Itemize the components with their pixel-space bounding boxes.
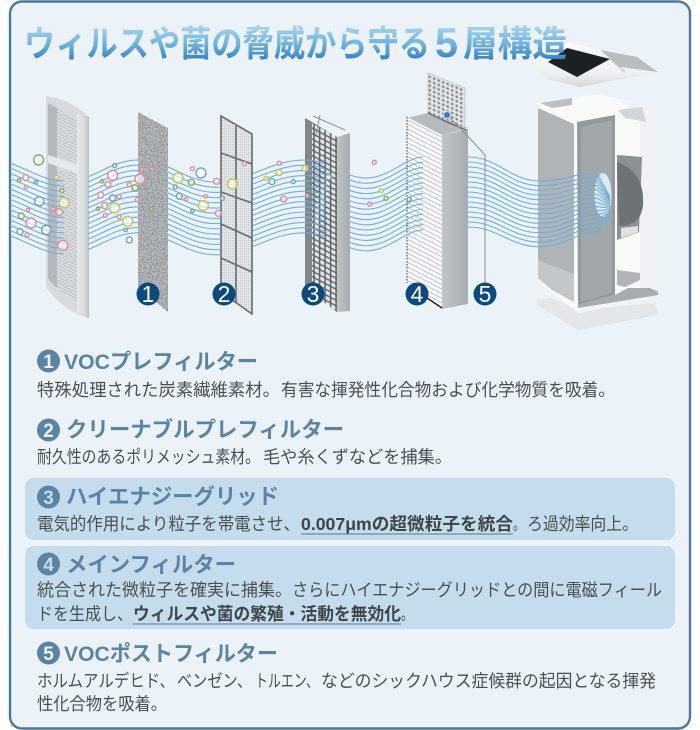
- air purifier base: [537, 298, 658, 330]
- filter illustration: 1 carbon fibre VOC pre-filter: [138, 112, 168, 312]
- section 4: main filter panel: 。: [401, 604, 413, 624]
- section 2: cleanable pre-filter: 耐久性のあるポリメッシュ素材。: [37, 447, 260, 467]
- section 5: VOC post-filter: 5: [43, 644, 54, 665]
- section 5: VOC post-filter: ベンゼン、: [177, 671, 252, 691]
- filter illustration: 2 cleanable pre-filter: [221, 116, 252, 314]
- air purifier body: [538, 94, 658, 313]
- section 2: cleanable pre-filter: 2: [43, 421, 54, 442]
- airborne particles: [17, 155, 411, 250]
- section 5: VOC post-filter: [37, 642, 656, 714]
- section 2: cleanable pre-filter: 毛や糸くずなどを捕集。: [263, 447, 452, 467]
- section 4: main filter panel: さらにハイエナジーグリッドとの間に電磁フィール: [292, 580, 662, 600]
- section 3: high-energy grid panel: 3: [43, 488, 54, 509]
- section 1: VOC pre-filter: VOCプレフィルター: [64, 350, 258, 374]
- badge 4: [406, 281, 428, 307]
- section 3: high-energy grid panel: 電気的作用により粒子を帯電させ、: [37, 514, 300, 534]
- badge 5: [474, 281, 496, 307]
- section 5: VOC post-filter: 性化合物を吸着。: [37, 694, 167, 714]
- air purifier top lid: [532, 42, 658, 87]
- section 3: high-energy grid panel: ろ過効率向上。: [527, 514, 638, 534]
- section 4: main filter panel: [25, 546, 675, 629]
- filter illustration: front cover: [46, 96, 89, 318]
- section 4: main filter panel: メインフィルター: [66, 553, 236, 577]
- section 4: main filter panel: 4: [43, 555, 54, 576]
- leader line to number 5: [444, 112, 485, 285]
- badge 2: 2: [218, 281, 230, 307]
- section 4: main filter panel: ウィルスや菌の繁殖・活動を無効化: [133, 604, 401, 624]
- section 2: cleanable pre-filter: [37, 417, 452, 467]
- badge 2: [212, 281, 236, 307]
- section 5: VOC post-filter: などのシックハウス症候群の起因となる揮発: [321, 671, 656, 691]
- filter illustration: 4 main filter: [407, 113, 468, 309]
- airflow waves: [10, 157, 610, 255]
- section 3: high-energy grid panel: 0.007μmの超微粒子を統合: [301, 514, 514, 534]
- badge 1: 1: [142, 281, 154, 307]
- section 5: VOC post-filter: VOCポストフィルター: [64, 642, 278, 666]
- badge 4: 4: [411, 281, 424, 307]
- section 1: VOC pre-filter: [37, 350, 615, 400]
- section 1: VOC pre-filter: 有害な揮発性化合物および化学物質を吸着。: [281, 380, 615, 400]
- filter illustration: 3 high-energy grid: [305, 115, 350, 312]
- badge 1: [136, 281, 160, 307]
- title: 層構造: [463, 23, 567, 64]
- section 5: VOC post-filter: トルエン、: [255, 671, 319, 691]
- section 1: VOC pre-filter: 特殊処理された炭素繊維素材。: [37, 380, 280, 400]
- title: 5: [435, 19, 458, 66]
- section 3: high-energy grid panel: 。: [513, 514, 525, 534]
- section 2: cleanable pre-filter: クリーナブルプレフィルター: [66, 417, 344, 442]
- title: ウィルスや菌の脅威から守る: [24, 23, 430, 64]
- section 1: VOC pre-filter: 1: [43, 352, 54, 373]
- section 3: high-energy grid panel: ハイエナジーグリッド: [66, 484, 279, 509]
- section 4: main filter panel: 統合された微粒子を確実に捕集。: [37, 580, 292, 600]
- section 4: main filter panel: ドを生成し、: [37, 604, 133, 624]
- badge 3: [302, 281, 324, 307]
- section 3: high-energy grid panel: [25, 478, 675, 540]
- badge 3: 3: [307, 281, 319, 307]
- badge 5: 5: [479, 281, 491, 307]
- filter illustration: 5 VOC post-filter: [428, 73, 465, 132]
- section 5: VOC post-filter: ホルムアルデヒド、: [37, 671, 175, 691]
